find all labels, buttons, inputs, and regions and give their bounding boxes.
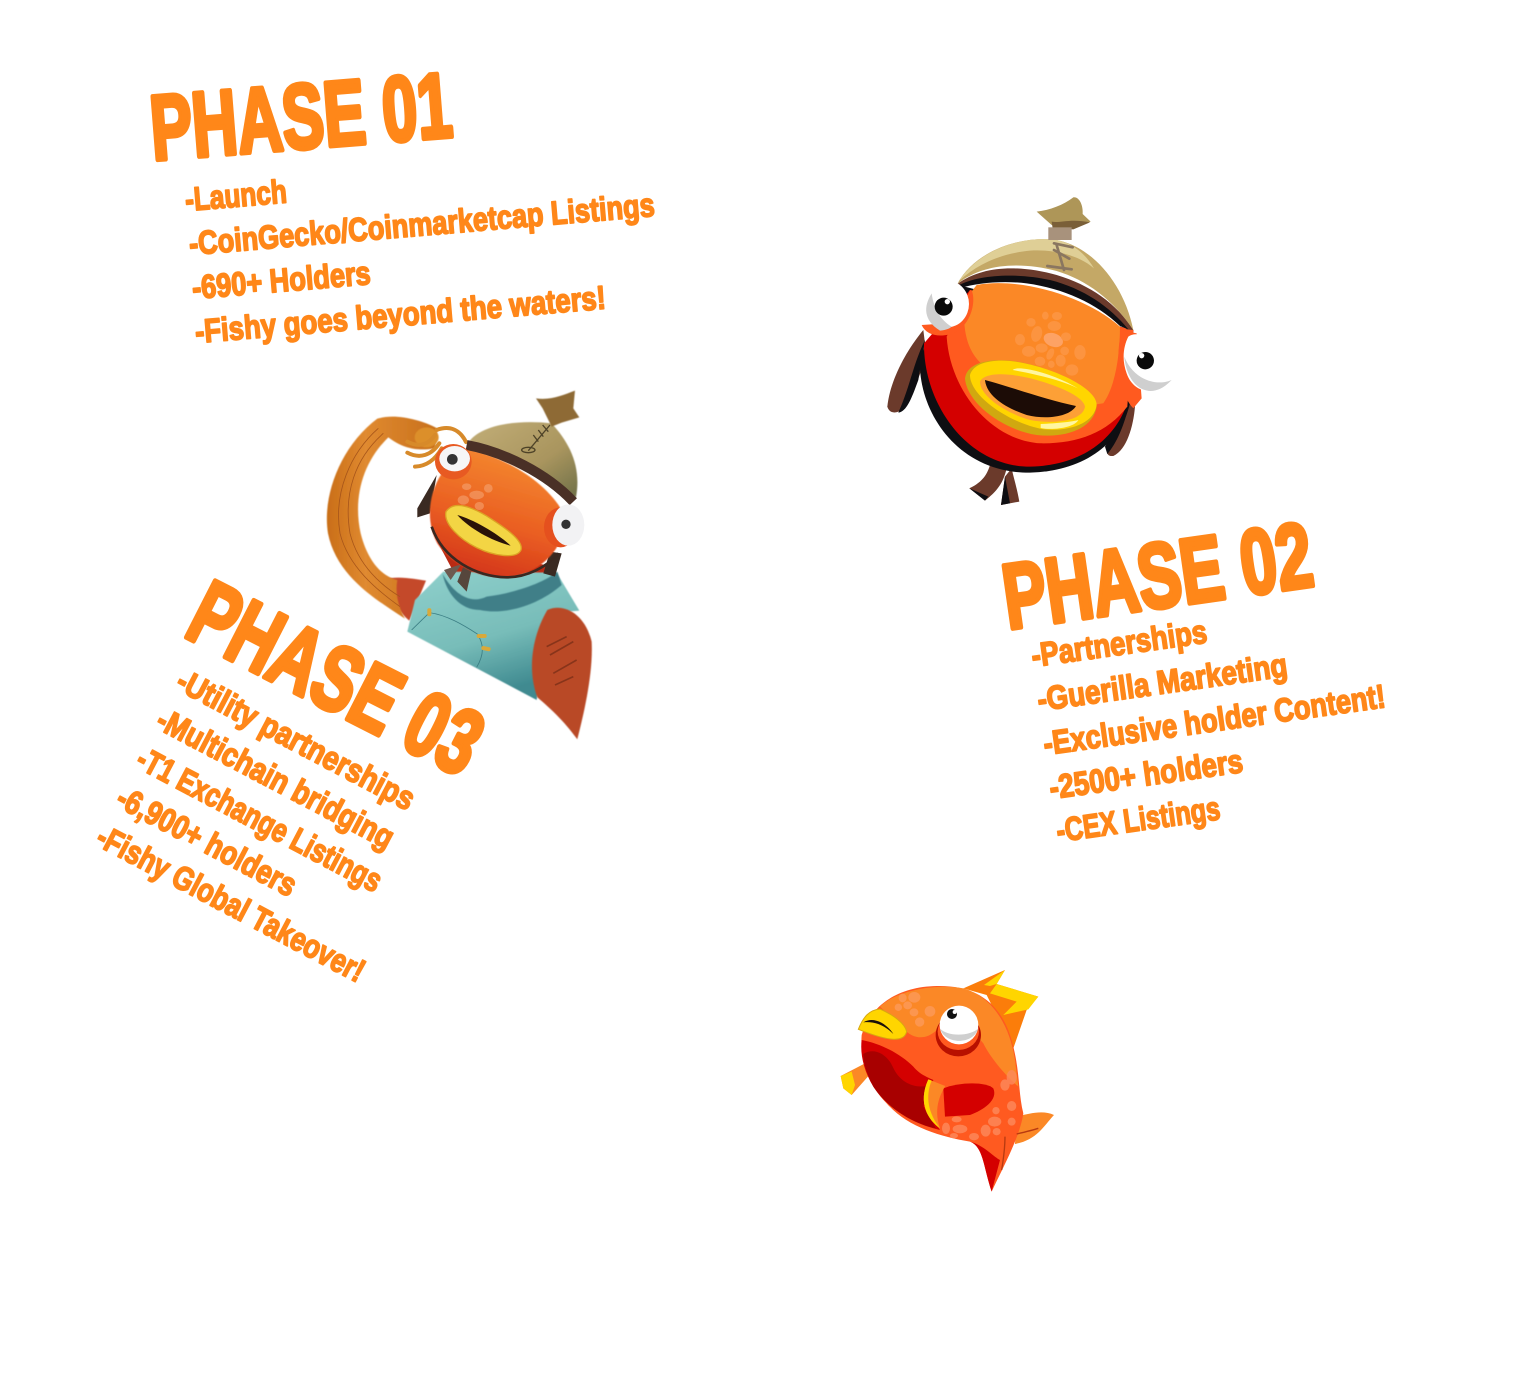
lips <box>965 360 1097 436</box>
head scales <box>458 483 493 510</box>
fish: round cartoon fish with hat <box>887 197 1172 505</box>
waters item: -Fishy goes beyond the waters! <box>193 279 607 350</box>
hat band <box>467 445 573 502</box>
phase 02 heading: PHASE 02 <box>996 504 1319 649</box>
hat knot <box>1037 197 1091 240</box>
mouth <box>985 380 1076 417</box>
fish: realistic saluting fishstick <box>327 391 592 739</box>
hat band <box>957 268 1133 330</box>
red belly <box>861 1040 940 1130</box>
fish: swimming goldfish <box>841 970 1054 1192</box>
left eye <box>435 444 472 479</box>
phase 02 list <box>1029 613 1388 849</box>
chin strap <box>432 527 558 577</box>
tail fin <box>1015 1112 1054 1144</box>
right arm <box>532 608 592 739</box>
fingers <box>407 428 466 467</box>
body red <box>924 290 1133 467</box>
cex item: -CEX Listings <box>1054 789 1222 849</box>
exchange item: -T1 Exchange Listings <box>131 739 389 899</box>
side patch <box>943 1083 994 1117</box>
stitches <box>1047 243 1073 270</box>
right fin <box>1107 403 1135 456</box>
right arm feathers <box>547 637 577 685</box>
feet <box>969 465 1007 501</box>
dark belly <box>863 1051 936 1128</box>
dorsal fin <box>963 970 1038 1048</box>
scales <box>942 1070 1017 1140</box>
upper arm <box>383 578 426 621</box>
hat <box>468 422 577 497</box>
body orange <box>964 283 1120 406</box>
guerilla item: -Guerilla Marketing <box>1035 646 1290 718</box>
holders item: -6,900+ holders <box>111 778 303 904</box>
right eye <box>1118 330 1172 408</box>
holders item: -2500+ holders <box>1047 742 1245 806</box>
hat highlight <box>959 239 1094 281</box>
hat knot <box>536 391 579 427</box>
takeover item: -Fishy Global Takeover! <box>91 817 372 989</box>
top orange band <box>880 987 1018 1087</box>
listings item: -CoinGecko/Coinmarketcap Listings <box>187 186 656 262</box>
tail shadow <box>970 1142 1000 1192</box>
hat <box>957 239 1133 330</box>
pectoral fin <box>924 1079 945 1128</box>
phase 03 list <box>91 661 422 989</box>
tail lines <box>1002 1128 1038 1170</box>
lips <box>858 1009 907 1039</box>
eye <box>936 1006 981 1056</box>
body <box>861 986 1023 1192</box>
left eye <box>922 281 973 336</box>
lip highlights <box>1013 368 1078 429</box>
content item: -Exclusive holder Content! <box>1041 677 1388 762</box>
phase 03 heading: PHASE 03 <box>173 562 499 795</box>
body outline <box>920 285 1133 473</box>
collar <box>443 572 562 611</box>
hat stitching <box>522 425 550 453</box>
arm <box>327 417 437 619</box>
scales <box>1042 330 1065 350</box>
left fin <box>887 330 927 412</box>
utility item: -Utility partnerships <box>171 661 422 817</box>
holders item: -690+ Holders <box>190 254 372 306</box>
fist <box>415 427 439 447</box>
head <box>430 449 564 577</box>
arm lines <box>339 428 400 607</box>
inner mouth rim <box>980 374 1085 422</box>
body mid <box>947 290 1133 443</box>
mouth <box>863 1020 893 1034</box>
neck <box>438 543 553 600</box>
vest seam and buttons <box>412 608 491 667</box>
right eye <box>544 504 584 547</box>
vest <box>407 572 579 700</box>
mouth <box>457 515 511 546</box>
partnerships item: -Partnerships <box>1029 613 1209 674</box>
head scales <box>895 992 935 1027</box>
head straps <box>417 475 562 592</box>
phase 01 list <box>183 173 656 350</box>
phase 01 heading: PHASE 01 <box>147 55 456 180</box>
multichain item: -Multichain bridging <box>151 700 401 856</box>
lips <box>446 506 521 556</box>
left fin <box>841 1063 869 1095</box>
launch item: -Launch <box>183 173 288 218</box>
